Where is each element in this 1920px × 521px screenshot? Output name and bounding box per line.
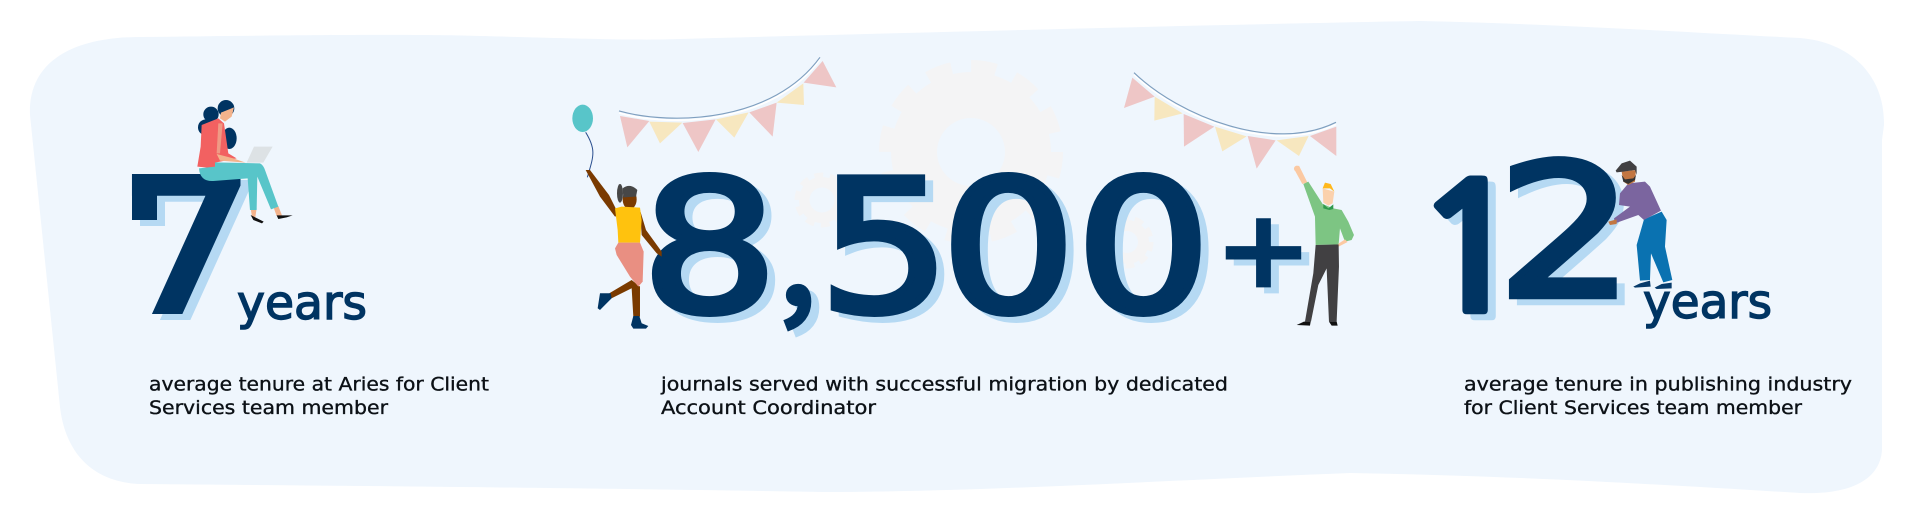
stat: 8,500+	[641, 141, 1313, 355]
figure: man reaching up	[1294, 166, 1354, 326]
caption: left: average tenure at Aries for Client	[149, 374, 489, 396]
stat: 12: 1	[1410, 163, 1531, 339]
caption: right: average tenure in publishing industry	[1464, 374, 1852, 396]
stat: 8,500+: +	[1214, 186, 1313, 313]
bunting left	[619, 57, 836, 152]
figure: man pushing the 2	[1608, 161, 1672, 289]
bunting right	[1124, 73, 1336, 169]
caption: left	[149, 374, 489, 419]
stat: 8,500+: 0	[941, 141, 1076, 355]
label: years left: years	[237, 276, 367, 331]
caption: centre: Account Coordinator	[661, 397, 876, 419]
background gears	[797, 67, 1151, 266]
figure: woman with balloon	[572, 105, 662, 329]
stat: 12	[1410, 126, 1634, 340]
stat: 8,500+: 8	[641, 142, 778, 355]
label: years right: years	[1643, 275, 1772, 330]
stat: 8,500+: 0	[1076, 141, 1211, 355]
stat: 8,500+: ,	[779, 173, 816, 339]
caption: left: Services team member	[149, 397, 388, 419]
caption: right	[1464, 374, 1852, 419]
caption: centre	[660, 374, 1228, 419]
figure: woman with laptop	[197, 100, 293, 223]
stat: 7: 7	[118, 142, 255, 355]
caption: right: for Client Services team member	[1464, 397, 1802, 419]
stat: 12: 2	[1497, 126, 1634, 340]
caption: centre: journals served with successful migration by dedicated	[660, 374, 1228, 396]
stat: 8,500+: 5	[818, 142, 951, 355]
